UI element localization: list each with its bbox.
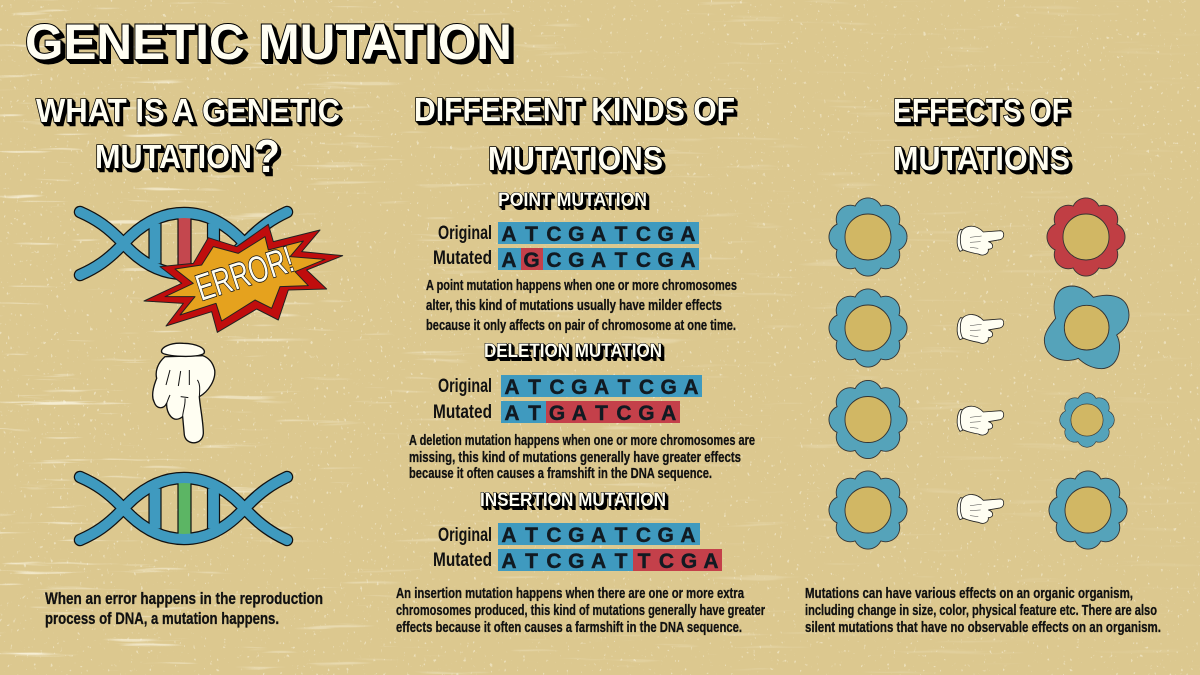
text: what a mutation is: process of DNA, a mutation happens. xyxy=(45,609,279,628)
subheading: INSERTION MUTATION xyxy=(480,490,666,511)
heading: different kinds of mutations: MUTATIONS xyxy=(488,140,663,177)
sequence comparison: ATCGATTCGA xyxy=(501,550,719,573)
description: A deletion mutation happens when one or more chromosomes are xyxy=(409,432,755,449)
heading: what is a genetic mutation: ? xyxy=(254,130,280,182)
labels: Original xyxy=(438,525,492,546)
row: color change xyxy=(829,198,1125,276)
labels xyxy=(433,525,492,571)
labels: Mutated xyxy=(433,550,492,571)
title: GENETIC MUTATION xyxy=(25,14,512,70)
heading: effects of mutations: MUTATIONS xyxy=(893,140,1070,177)
labels: Original xyxy=(438,223,492,244)
sequence comparison: ATCGATCGA xyxy=(504,376,699,399)
sequence comparison: AGCGATCGA xyxy=(501,249,696,272)
panel: effects of mutations xyxy=(805,92,1161,636)
insertion mutation xyxy=(396,490,765,636)
row: physical feature change xyxy=(829,286,1129,369)
heading: effects of mutations: EFFECTS OF xyxy=(893,92,1069,129)
row: silent mutation xyxy=(829,471,1127,549)
description: missing, this kind of mutations generally have greater effects xyxy=(409,449,741,466)
subheading: DELETION MUTATION xyxy=(484,341,662,362)
description: effects because it often causes a farmshift in the DNA sequence. xyxy=(396,619,742,636)
sequence comparison: ATGATCGA xyxy=(504,402,676,425)
labels xyxy=(433,223,492,269)
text: what a mutation is xyxy=(45,589,323,628)
description: chromosomes produced, this kind of mutations generally have greater xyxy=(396,602,765,619)
deletion mutation xyxy=(409,341,755,482)
labels: Mutated xyxy=(433,248,492,269)
description xyxy=(426,277,737,334)
description: alter, this kind of mutations usually have milder effects xyxy=(426,297,722,314)
heading: effects of mutations xyxy=(893,92,1070,177)
description: An insertion mutation happens when there are one or more extra xyxy=(396,585,744,602)
heading: what is a genetic mutation xyxy=(36,92,340,182)
description xyxy=(805,585,1161,636)
description xyxy=(396,585,765,636)
panel: what is a genetic mutation xyxy=(36,92,343,628)
sequence comparison xyxy=(498,222,699,272)
description: because it only affects on pair of chromosome at one time. xyxy=(426,317,736,334)
sequence comparison xyxy=(498,523,722,573)
heading: different kinds of mutations xyxy=(414,91,735,177)
description: because it often causes a framshift in the DNA sequence. xyxy=(409,465,712,482)
description xyxy=(409,432,755,482)
panel: different kinds of mutations xyxy=(396,91,765,636)
heading: what is a genetic mutation: WHAT IS A GENETIC xyxy=(36,92,340,129)
heading: different kinds of mutations: DIFFERENT KINDS OF xyxy=(414,91,735,128)
labels xyxy=(433,376,492,423)
row: size change xyxy=(829,380,1114,459)
error label: ERROR! xyxy=(191,239,299,309)
icon: error burst xyxy=(144,224,343,332)
description: A point mutation happens when one or more chromosomes xyxy=(426,277,737,294)
sequence comparison: ATCGATCGA xyxy=(501,223,696,246)
labels: Mutated xyxy=(433,402,492,423)
sequence comparison xyxy=(501,375,702,425)
DNA with green repaired base xyxy=(80,477,287,540)
DNA with red error base xyxy=(80,212,287,275)
point mutation xyxy=(426,190,737,334)
subheading: POINT MUTATION xyxy=(498,190,647,211)
text: what a mutation is: When an error happens in the reproduction xyxy=(45,589,323,608)
icon: pointing down hand xyxy=(153,343,215,443)
labels: Original xyxy=(438,376,492,397)
heading: what is a genetic mutation: MUTATION xyxy=(95,138,252,175)
sequence comparison: ATCGATCGA xyxy=(501,524,696,547)
